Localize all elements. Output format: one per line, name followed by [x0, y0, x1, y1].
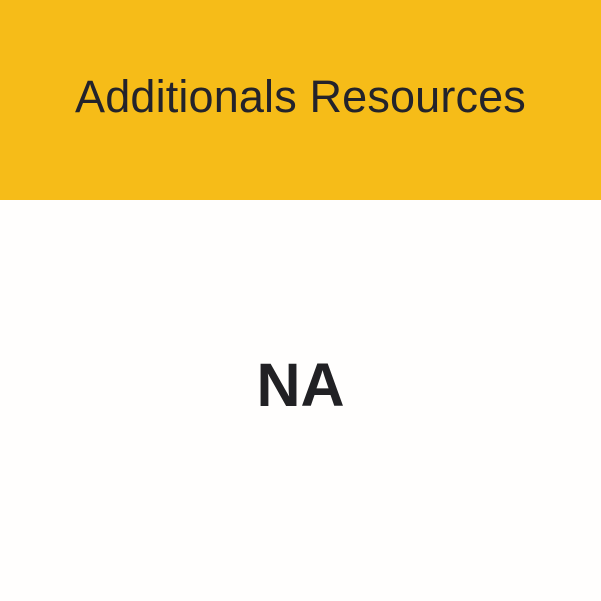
- panel: header band: [0, 0, 601, 200]
- title: Additionals Resources: [75, 71, 526, 122]
- text: NA: NA: [256, 351, 345, 419]
